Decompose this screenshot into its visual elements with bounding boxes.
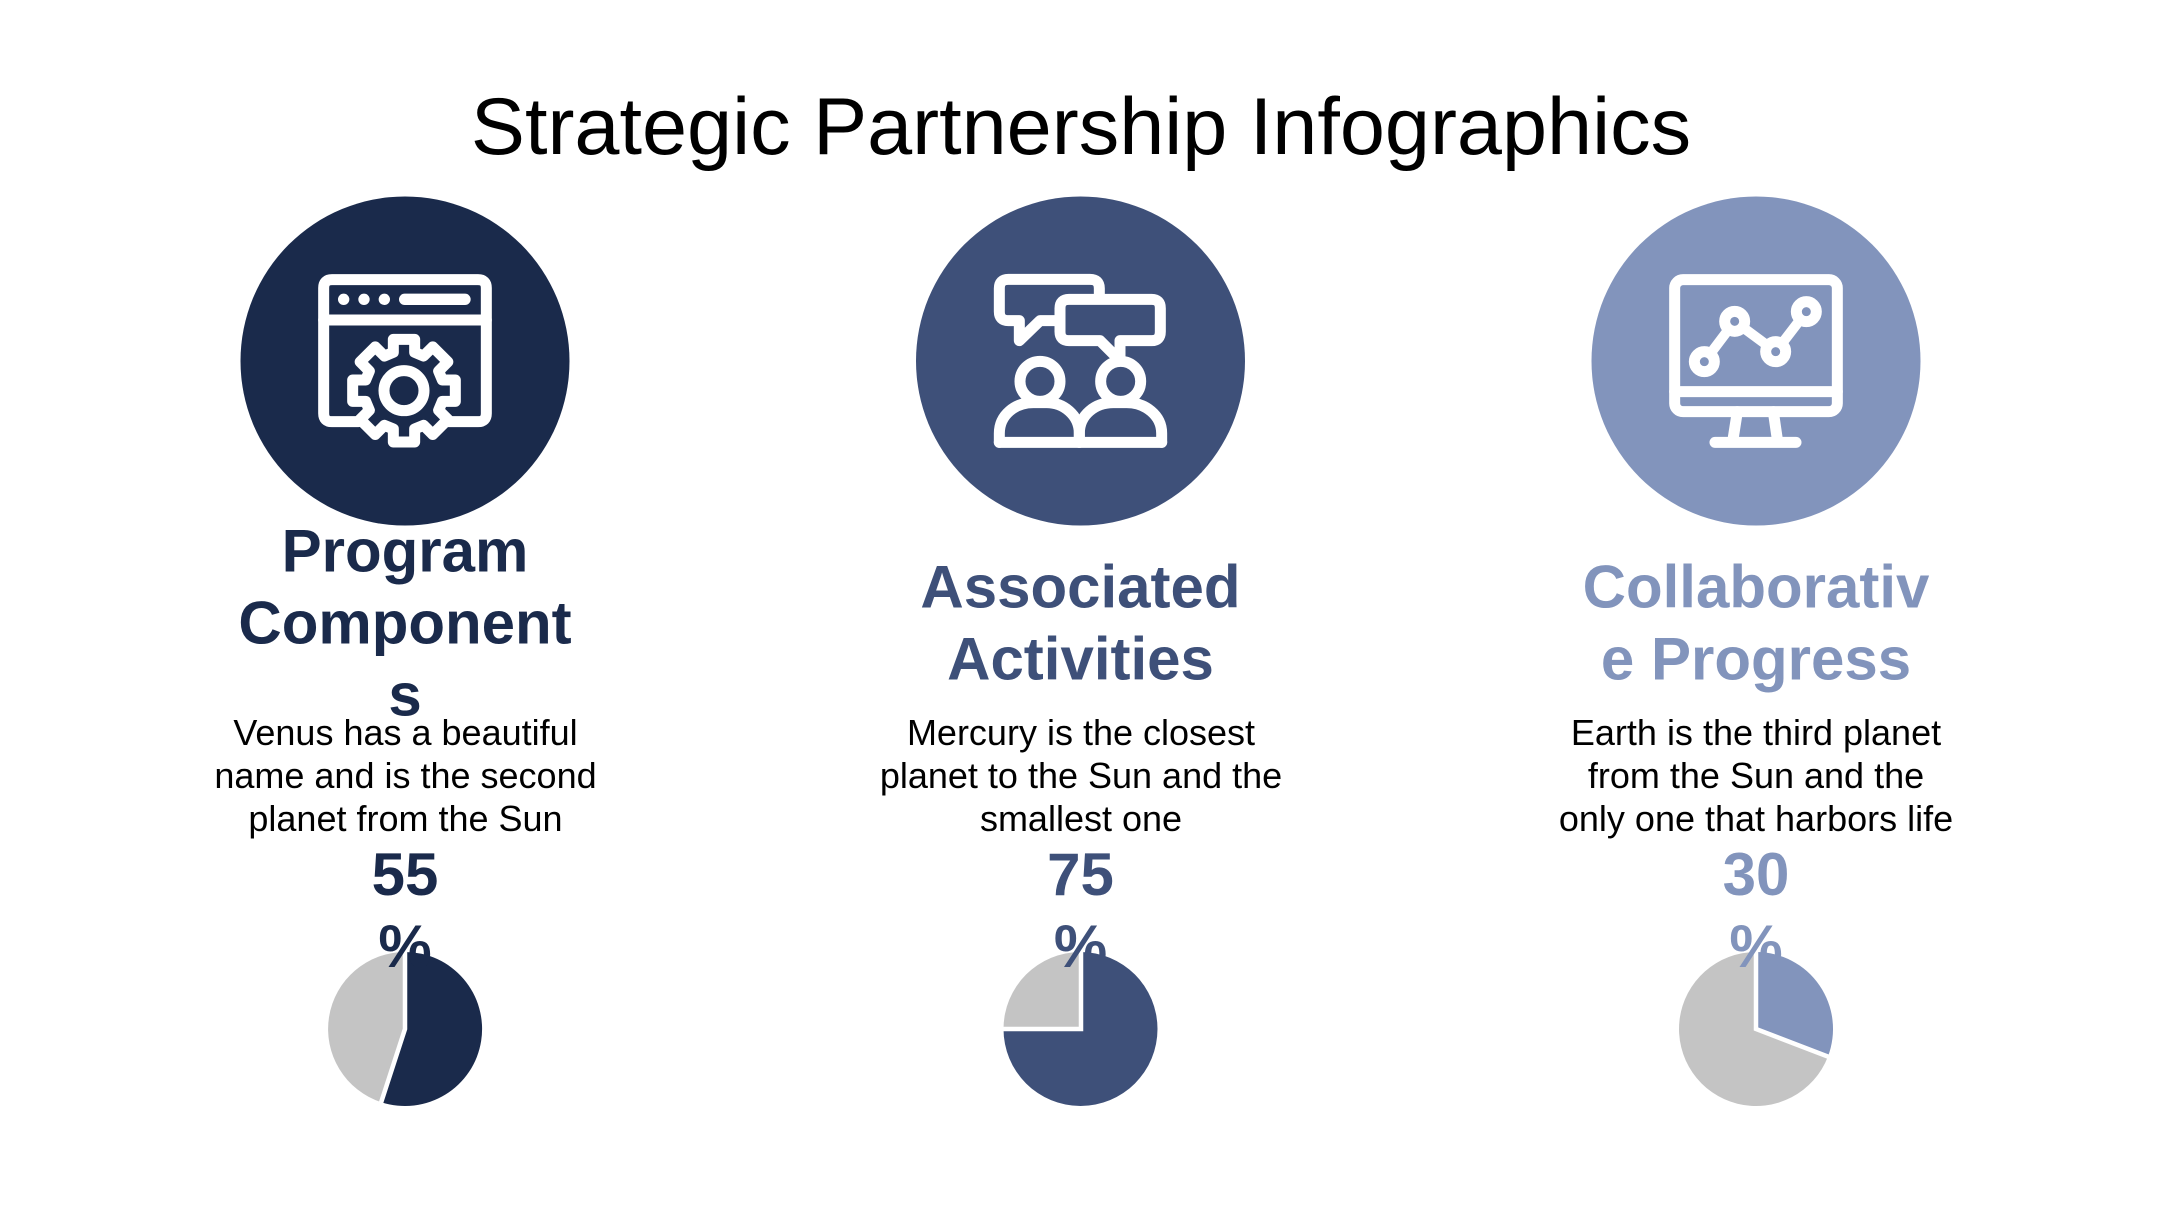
- percentage: 75: 75: [1047, 841, 1114, 908]
- icon: window with gear in circle: [240, 196, 570, 526]
- text block: mercury: Mercury is the closest: [907, 712, 1255, 753]
- percentage: 55: [372, 841, 438, 980]
- heading: program components: [238, 518, 572, 728]
- panel: program components: [214, 196, 597, 1106]
- text block: earth: from the Sun and the: [1588, 755, 1924, 796]
- pie chart: 30 percent: [1679, 950, 1833, 1106]
- icon: two people talking in circle: [916, 196, 1245, 526]
- heading: program components: Program: [282, 518, 528, 584]
- percentage: 55: 55: [372, 841, 438, 908]
- text block: mercury: [880, 712, 1282, 839]
- percentage: 55: %: [378, 913, 432, 980]
- heading: collaborative progress: [1583, 554, 1930, 692]
- percentage: 30: [1723, 841, 1789, 980]
- percentage: 30: %: [1729, 913, 1783, 980]
- heading: program components: Component: [238, 590, 572, 656]
- text block: earth: Earth is the third planet: [1571, 712, 1941, 753]
- text block: venus: name and is the second: [214, 755, 597, 796]
- percentage: 75: [1047, 841, 1114, 980]
- icon: monitor with line chart in circle: [1592, 196, 1920, 526]
- percentage: 75: %: [1054, 913, 1107, 980]
- panel: associated activities: [880, 196, 1282, 1106]
- heading: collaborative progress: Collaborativ: [1583, 554, 1930, 620]
- pie chart: 55 percent: [328, 950, 482, 1106]
- percentage: 30: 30: [1723, 841, 1789, 908]
- heading: collaborative progress: e Progress: [1601, 626, 1911, 692]
- panel: collaborative progress: [1559, 196, 1953, 1106]
- heading: associated activities: Associated: [920, 554, 1241, 620]
- text block: earth: [1559, 712, 1953, 839]
- text block: earth: only one that harbors life: [1559, 798, 1953, 839]
- text block: mercury: smallest one: [980, 798, 1182, 839]
- heading: program components: s: [388, 662, 422, 728]
- pie chart: 75 percent: [1002, 950, 1158, 1106]
- heading: associated activities: [920, 554, 1241, 692]
- text block: venus: Venus has a beautiful: [233, 712, 578, 753]
- text block: venus: [214, 712, 597, 839]
- title: Strategic Partnership Infographics: [471, 82, 1691, 172]
- text block: mercury: planet to the Sun and the: [880, 755, 1282, 796]
- heading: associated activities: Activities: [947, 626, 1214, 692]
- text block: venus: planet from the Sun: [248, 798, 563, 839]
